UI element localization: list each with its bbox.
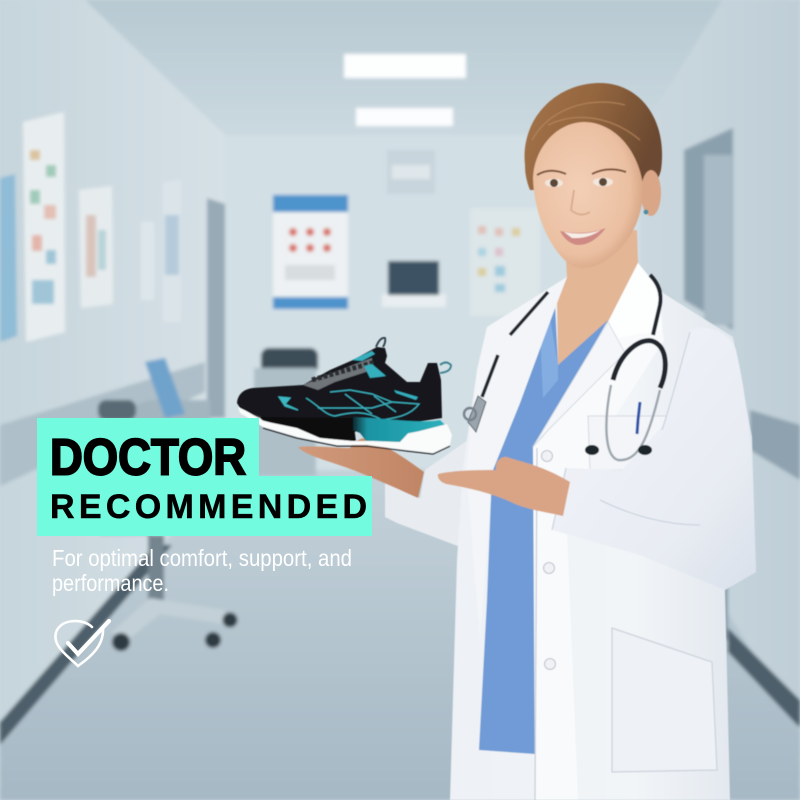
outsole [263, 428, 450, 454]
back wall poster blue [273, 195, 348, 309]
chair caster 3 [222, 612, 238, 628]
lab coat body [450, 263, 756, 800]
shoe [237, 338, 452, 454]
left skirting [0, 545, 172, 745]
lower pocket [612, 628, 717, 772]
banner block: recommended [37, 476, 372, 536]
office chair base [148, 535, 164, 605]
heading: recommended: RECOMMENDED [50, 488, 367, 526]
chest piece [468, 396, 486, 432]
ear [641, 170, 661, 216]
shoe black midsole band [238, 406, 356, 442]
coat buttons [542, 450, 556, 670]
right wall [640, 0, 800, 720]
chair caster 2 [205, 632, 221, 648]
stethoscope [464, 275, 665, 460]
ceiling light upper [344, 54, 466, 78]
left hand under shoe [298, 438, 424, 498]
teal side accent [364, 364, 386, 378]
ceiling [85, 0, 722, 135]
tongue loop [376, 338, 385, 347]
right skirting [728, 628, 800, 728]
door lower frame [702, 580, 728, 640]
subtitle text: performance. [52, 570, 169, 596]
ear tips [585, 445, 599, 455]
heel loop [440, 362, 451, 373]
wavy side lines [279, 390, 419, 420]
tube left [482, 292, 548, 397]
neck [557, 230, 638, 365]
icon: heart with check [55, 621, 109, 666]
coat lapel left [466, 277, 567, 640]
heading: doctor: DOCTOR [50, 428, 246, 486]
right door [684, 128, 733, 330]
back wall monitor [382, 294, 446, 307]
teal midsole section [353, 417, 447, 442]
left wall poster 4 [163, 180, 181, 322]
left wall poster 3 [79, 186, 113, 308]
floor [0, 470, 800, 800]
shoe grey panel [303, 358, 372, 390]
eyebrows [537, 169, 626, 175]
wall fixture [387, 150, 435, 194]
face [533, 122, 643, 268]
shoe upper [237, 347, 442, 432]
coat lapel right [533, 263, 664, 800]
scrub top [479, 303, 608, 754]
left wall handrail [0, 362, 205, 486]
left chair [95, 400, 210, 535]
tube right [650, 275, 661, 335]
headline banner [37, 418, 372, 536]
yoke [613, 341, 665, 388]
right wall handrail [750, 410, 800, 480]
scrub trousers [479, 745, 538, 800]
small left notices [141, 222, 154, 300]
chair caster 1 [112, 633, 130, 651]
nose [571, 190, 590, 215]
pen [637, 402, 640, 434]
banner block: doctor [37, 418, 259, 478]
doctor figure [298, 83, 756, 800]
coat sleeve left arm [385, 440, 480, 548]
left wall [0, 0, 225, 725]
subtitle text: For optimal comfort, support, and [52, 545, 352, 571]
hair [525, 83, 662, 190]
tongue teal [352, 351, 375, 361]
eyes [545, 179, 563, 187]
left door [207, 198, 225, 418]
back wall [225, 135, 645, 470]
left wall poster 2 [23, 112, 65, 342]
coat placket line [535, 448, 537, 800]
metal tube [606, 385, 660, 460]
ceiling light lower [356, 108, 453, 126]
chest pocket [588, 416, 668, 470]
waiting chair [261, 348, 318, 374]
left wall poster far left [0, 174, 17, 342]
coat right sleeve [552, 328, 756, 590]
mouth [560, 228, 606, 245]
right hand open palm [438, 457, 570, 516]
shoe laces [312, 362, 375, 380]
white midsole [238, 407, 452, 453]
back wall chart right [470, 208, 540, 316]
